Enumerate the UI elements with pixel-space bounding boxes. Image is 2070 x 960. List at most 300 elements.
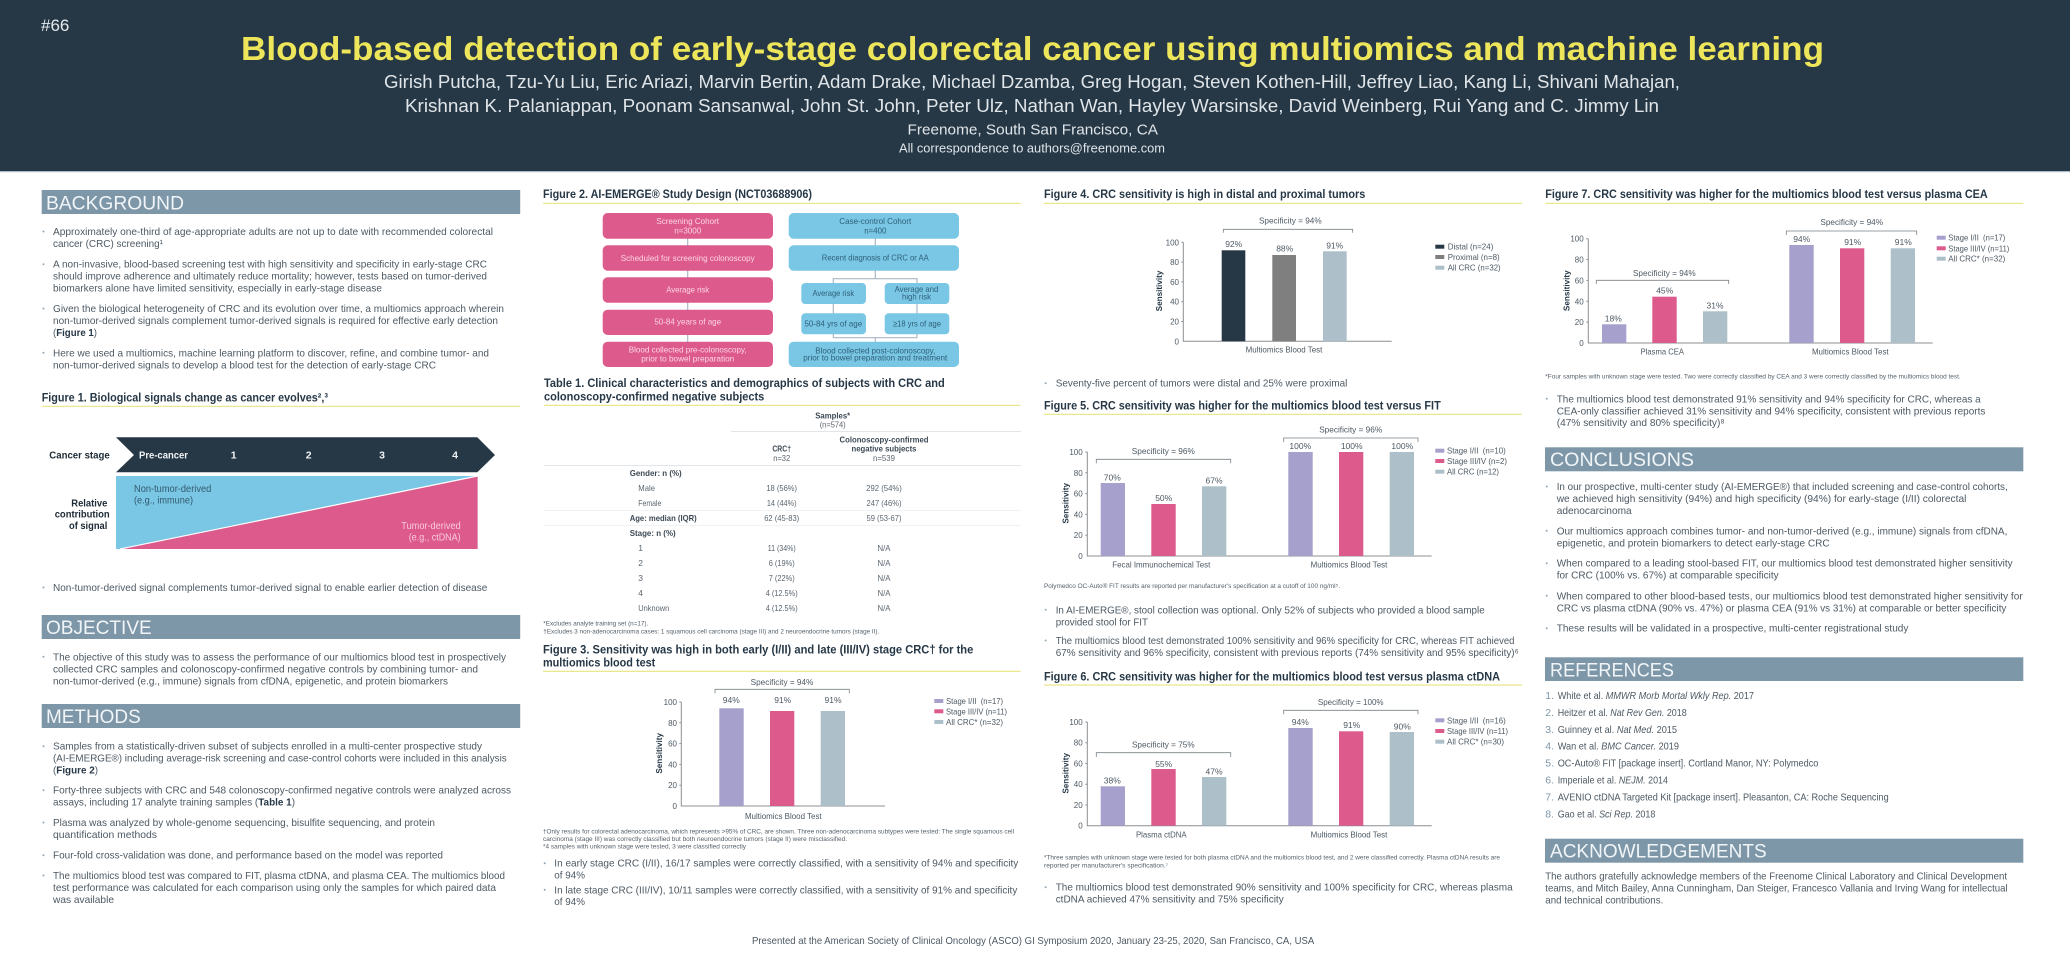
text: methods bullets [42,741,511,906]
text: figure 6 bullet: ctDNA achieved 47% sensitivity and 75% specificity [1056,894,1284,906]
flowchart: case-control cohort: Average risk [812,288,855,298]
text: acknowledgements: teams, and Mitch Bailey, Anna Cunningham, Dan Steiger, Francesco Vallania and Irving Wang for intellectual [1545,882,2008,894]
table rows: 7 (22%) [769,573,795,583]
figure 6 footnotes: *Three samples with unknown stage were tested for both plasma ctDNA and the multiomics blood test, and 2 were classified correctly. Plasma ctDNA results are [1044,854,1500,861]
diagram: relative contribution of signal: Tumor-derived [401,521,461,532]
heading: figure 4: Figure 4. CRC sensitivity is high in distal and proximal tumors [1044,187,1366,201]
figure 5 footnote: Polymedco OC-Auto® FIT results are reported per manufacturer's specification at a cutoff of 100 ng/ml⁵. [1044,582,1340,590]
bar chart: figure 6: 94% [1292,717,1309,727]
table rows: 292 (54%) [866,483,902,493]
text: background bullets: non-tumor-derived signals complement tumor-derived signals is required for effective early detection [53,315,498,327]
table header: n=32 [773,453,790,463]
table footnotes [543,620,879,635]
flowchart: case-control cohort: Recent diagnosis of CRC or AA [822,253,929,263]
legend: figure 6: Stage I/II (n=16) [1447,715,1506,725]
bar chart: figure 3: 40 [668,760,678,769]
bar chart: figure 5: 100% [1391,441,1414,451]
table rows: N/A [878,588,891,598]
table header: (n=574) [820,420,846,430]
legend: figure 4 [1435,242,1501,273]
table rows: 4 (12.5%) [766,603,798,613]
bar chart: figure 7: 31% [1706,300,1724,310]
text: conclusions bullets: we achieved high sensitivity (94%) and high specificity (94%) for early-stage (I/II) colorectal [1556,493,1966,505]
bar chart: figure 7: Multiomics Blood Test [1812,347,1889,357]
bar chart: figure 6: 47% [1205,767,1223,777]
text: conclusions bullets: CRC vs plasma ctDNA (90% vs. 47%) or plasma CEA (91% vs 31%) at comparable or better specificity [1557,602,2007,614]
diagram: cancer stage arrow: 4 [452,450,458,462]
text: background bullets: Here we used a multiomics, machine learning platform to discover, refine, and combine tumor- and [53,347,489,359]
text: background bullets: biomarkers alone have limited sensitivity, especially in early-stage disease [53,283,382,295]
reference list: 7. [1545,792,1554,804]
text: methods bullets: Forty-three subjects with CRC and 548 colonoscopy-confirmed negative controls were analyzed across [53,785,511,797]
section header: references [1545,657,2023,682]
table rows: 3 [638,573,643,583]
bar chart: figure 4: 60 [1170,278,1180,287]
bar chart: figure 3: 91% [774,695,792,705]
figure 6 footnotes: reported per manufacturer's specification.⁷ [1044,862,1169,869]
reference list: Guinney et al. Nat Med. 2015 [1558,724,1677,736]
panel: acknowledgements [1545,839,2023,906]
footer: Presented at the American Society of Clinical Oncology (ASCO) GI Symposium 2020, January 23-25, 2020, San Francisco, CA, USA [752,935,1314,947]
text: acknowledgements: The authors gratefully acknowledge members of the Freenome Clinical Laboratory and Clinical Development [1545,870,2007,882]
flowchart: screening cohort: Scheduled for screening colonoscopy [621,253,755,263]
text: methods bullets: Four-fold cross-validation was done, and performance based on the model was reported [53,850,443,862]
bar chart: figure 6: Specificity = 100% [1318,697,1384,707]
text: methods bullets: (AI-EMERGE®) including average-risk screening and case-control cohorts were included in this analysis [53,753,507,765]
panel: conclusions [1545,447,2023,635]
bar chart: figure 7: Sensitivity [1562,270,1571,311]
legend: figure 6: All CRC* (n=30) [1447,737,1504,747]
panel: objective [42,615,520,687]
text: methods bullets: Samples from a statistically-driven subset of subjects enrolled in a multi-center prospective study [53,741,483,753]
panel: figure 1 [42,391,520,594]
text: figure 7 bullet: CEA-only classifier achieved 31% sensitivity and 94% specificity, consistent with previous reports [1557,405,1985,417]
diagram: cancer stage arrow: Pre-cancer [139,450,188,462]
table header [544,410,1021,466]
bar chart: figure 3: Multiomics Blood Test [745,811,822,821]
bar chart: figure 4: 40 [1170,298,1180,307]
heading: figure 3: multiomics blood test [543,655,655,669]
flowchart: case-control cohort: ≥18 yrs of age [893,318,941,328]
section header: references: REFERENCES [1550,660,1674,682]
text: figure 7 bullet: (47% sensitivity and 80% specificity)⁸ [1557,417,1725,429]
figure 7 footnote: *Four samples with unknown stage were tested. Two were correctly classified by CEA and 3 were correctly classified by the multiomics blood test. [1545,374,1961,381]
table rows: Gender: n (%) [630,468,682,478]
legend: figure 7: All CRC* (n=32) [1948,254,2005,264]
bar chart: figure 4: Multiomics Blood Test [1246,344,1323,354]
table rows: Female [638,498,662,508]
bar chart: figure 5: 50% [1155,493,1173,503]
bar chart: figure 7: Specificity = 94% [1633,268,1696,278]
legend: figure 7: Stage I/II (n=17) [1948,233,2005,243]
text: acknowledgements [1545,870,2008,906]
table header: CRC† [772,444,791,454]
heading: figure 5: Figure 5. CRC sensitivity was higher for the multiomics blood test versus FIT [1044,398,1441,412]
bar chart: figure 7: 45% [1656,286,1674,296]
flowchart: case-control cohort: high risk [902,291,932,301]
legend: figure 7: Stage III/IV (n=11) [1948,243,2009,253]
diagram: relative contribution of signal: of signal [69,520,107,532]
text: figure 3 bullets [544,858,1019,908]
table rows: N/A [878,573,891,583]
correspondence: All correspondence to authors@freenome.com [899,142,1165,156]
section header: background [42,190,520,214]
legend: figure 3: All CRC* (n=32) [946,717,1003,727]
table header: n=539 [873,453,895,463]
table rows: 6 (19%) [769,558,795,568]
flowchart: case-control cohort: 50-84 yrs of age [804,318,862,328]
section header: methods: METHODS [46,706,141,728]
heading: figure 1: Figure 1. Biological signals change as cancer evolves²,³ [42,391,328,405]
section header: conclusions [1545,447,2023,471]
table rows: 59 (53-67) [866,513,902,523]
legend: figure 6: Stage III/IV (n=11) [1447,726,1508,736]
authors: Krishnan K. Palaniappan, Poonam Sansanwal, John St. John, Peter Ulz, Nathan Wan, Hayley Warsinske, David Weinberg, Rui Yang and C. Jimmy Lin [405,96,1659,116]
bar chart: figure 5: 100% [1289,441,1312,451]
reference list: 6. [1545,775,1554,787]
heading: figure 3 [543,642,1021,672]
flowchart: screening cohort [603,213,773,367]
text: background bullets: A non-invasive, blood-based screening test with high sensitivity and specificity in early-stage CRC [53,259,487,271]
bar chart: figure 5: 20 [1074,531,1083,540]
table rows: 62 (45-83) [764,513,799,523]
table header: Colonoscopy-confirmed [840,434,928,444]
reference list: 5. [1545,758,1554,770]
bar chart: figure 4: 100 [1166,238,1180,247]
panel: background [42,190,520,371]
bar chart: figure 5: 67% [1205,475,1223,485]
text: methods bullets: (Figure 2) [53,765,98,777]
diagram: cancer stage arrow [49,437,495,472]
reference list: Imperiale et al. NEJM. 2014 [1558,775,1668,787]
section header: methods [42,704,520,728]
table footnotes: *Excludes analyte training set (n=17). [543,620,648,627]
bar chart: figure 6: Specificity = 75% [1132,739,1195,749]
figure 3 footnotes: *4 samples with unknown stage were tested, 3 were classified correctly [543,844,747,851]
panel: figure 7 [1545,187,2023,429]
diagram: relative contribution of signal: Non-tumor-derived [134,484,211,495]
text: methods bullets: assays, including 17 analyte training samples (Table 1) [53,797,295,809]
diagram: cancer stage arrow: 3 [379,450,385,462]
text: methods bullets: The multiomics blood test was compared to FIT, plasma ctDNA, and plasma CEA. The multiomics blood [53,870,505,882]
text: figure 3 bullets: of 94% [554,896,585,908]
bar chart: figure 6: 55% [1155,759,1173,769]
bar chart: figure 4 [1155,216,1501,354]
text: methods bullets: Plasma was analyzed by whole-genome sequencing, bisulfite sequencing, and protein [53,817,435,829]
bar chart: figure 6: 80 [1074,739,1083,748]
bar chart: figure 5: 60 [1074,490,1083,499]
bar chart: figure 5: Multiomics Blood Test [1311,559,1388,569]
heading: table 1 [544,376,1020,406]
reference list: AVENIO ctDNA Targeted Kit [package insert]. Pleasanton, CA: Roche Sequencing [1558,792,1889,804]
legend: figure 5: Stage III/IV (n=2) [1447,456,1507,466]
text: figure 6 bullet: The multiomics blood test demonstrated 90% sensitivity and 100% specificity for CRC, whereas plasma [1056,882,1513,894]
text: conclusions bullets: When compared to other blood-based tests, our multiomics blood test demonstrated higher sensitivity for [1557,590,2023,602]
bar chart: figure 7: 80 [1575,256,1584,265]
text: figure 4 bullet: Seventy-five percent of tumors were distal and 25% were proximal [1056,378,1347,390]
legend: figure 5: All CRC (n=12) [1447,467,1499,477]
diagram: cancer stage arrow: 2 [306,450,312,462]
text: background bullets [42,226,504,371]
text: conclusions bullets: Our multiomics approach combines tumor- and non-tumor-derived (e.g., immune) signals from cfDNA, [1557,525,2007,537]
table rows: 247 (46%) [866,498,902,508]
text: figure 6 bullet [1045,882,1513,906]
text: conclusions bullets: for CRC (100% vs. 67%) at comparable specificity [1557,570,1779,582]
bar chart: figure 6: 0 [1078,822,1083,831]
bar chart: figure 4: 20 [1170,318,1180,326]
text: conclusions bullets: epigenetic, and protein biomarkers to detect early-stage CRC [1557,537,1830,549]
text: background bullets: non-tumor-derived signals to develop a blood test for the detection of early-stage CRC [53,359,436,371]
section header: objective: OBJECTIVE [46,617,152,639]
table rows: 4 (12.5%) [766,588,798,598]
reference list: 8. [1545,808,1554,820]
legend: figure 7 [1937,233,2009,264]
bar chart: figure 3: 80 [668,719,678,728]
bar chart: figure 6: 20 [1074,801,1083,810]
table rows: 14 (44%) [767,498,797,508]
legend: figure 4: Distal (n=24) [1448,242,1494,252]
header banner [0,0,2070,172]
text: background bullets: should improve adherence and ultimately reduce mortality; however, tests based on tumor-derived [53,271,487,283]
text: conclusions bullets: In our prospective, multi-center study (AI-EMERGE®) that included screening and case-control cohorts, [1557,481,2008,493]
bar chart: figure 5 [1061,425,1507,569]
flowchart connectors [688,238,917,342]
bar chart: figure 4: 80 [1170,258,1180,267]
panel: figure 6 [1044,669,1522,906]
text: figure 5 bullets: provided stool for FIT [1056,616,1149,628]
bar chart: figure 5: 70% [1104,473,1121,483]
text: figure 7 bullet [1546,393,1985,429]
authors: Girish Putcha, Tzu-Yu Liu, Eric Ariazi, Marvin Bertin, Adam Drake, Michael Dzamba, Greg Hogan, Steven Kothen-Hill, Jeffrey Liao, Kang Li, Shivani Mahajan, [384,72,1680,92]
reference list: 3. [1545,724,1554,736]
bar chart: figure 5: 100% [1341,441,1363,451]
bar chart: figure 4: 92% [1225,239,1243,249]
reference list: 4. [1545,741,1554,753]
bar chart: figure 7: 100 [1570,235,1584,244]
text: conclusions bullets: adenocarcinoma [1557,505,1632,517]
bar chart: figure 7: 91% [1895,237,1912,247]
bar chart: figure 4: 91% [1326,240,1344,250]
bar chart: figure 3: 94% [723,695,740,705]
text: conclusions bullets: These results will be validated in a prospective, multi-center registrational study [1557,623,1909,635]
flowchart: case-control cohort: prior to bowel preparation and treatment [803,353,948,363]
text: objective bullet: non-tumor-derived (e.g., immune) signals from cfDNA, epigenetic, and protein biomarkers [53,675,448,687]
panel: figure 4 [1044,187,1522,390]
figure 3 footnotes: †Only results for colorectal adenocarcinoma, which represents >95% of CRC, are shown. Three non-adenocarcinoma subtypes were tested: The single squamous cell [543,828,1015,835]
flowchart: case-control cohort [789,213,959,367]
bar chart: figure 3: Specificity = 94% [751,677,814,687]
bar chart: figure 5: Fecal Immunochemical Test [1112,559,1211,569]
text: figure 1 bullet: Non-tumor-derived signal complements tumor-derived signal to enable earlier detection of disease [53,582,487,594]
table rows: 2 [638,558,643,568]
diagram: cancer stage arrow: Cancer stage [49,450,110,462]
panel: methods [42,704,520,906]
bar chart: figure 3: 91% [824,695,842,705]
text: objective bullet: The objective of this study was to assess the performance of our multiomics blood test in prospectively [53,651,507,663]
diagram: relative contribution of signal: contribution [55,509,110,521]
bar chart: figure 7: 18% [1605,313,1622,323]
flowchart: case-control cohort: Blood collected post-colonoscopy, [815,345,935,355]
table rows [544,468,1021,613]
section header: background: BACKGROUND [46,192,184,214]
bar chart: figure 5: 100 [1069,448,1083,457]
bar chart: figure 3: 100 [664,698,678,707]
text: figure 5 bullets [1045,604,1519,659]
bar chart: figure 6: Sensitivity [1061,752,1070,794]
text: objective bullet [42,651,507,687]
text: figure 7 bullet: The multiomics blood test demonstrated 91% sensitivity and 94% specificity for CRC, whereas a [1557,393,1981,405]
text: methods bullets: quantification methods [53,829,157,841]
affiliation: Freenome, South San Francisco, CA [908,123,1158,139]
text: figure 5 bullets: 67% sensitivity and 96% specificity, consistent with previous reports (74% sensitivity and 95% specificity)⁶ [1056,647,1519,659]
bar chart: figure 3: 20 [668,781,678,790]
figure 6 footnotes [1044,854,1500,869]
authors [384,72,1680,116]
text: objective bullet: collected CRC samples and colonoscopy-confirmed negative controls by combining tumor- and [53,663,478,675]
reference list [1545,690,1889,820]
panel: figure 2 study design [543,187,1021,367]
bar chart: figure 5: 0 [1078,552,1083,561]
flowchart: case-control cohort: n=400 [864,225,887,235]
text: background bullets: Approximately one-third of age-appropriate adults are not up to date with recommended colorectal [53,226,493,238]
legend: figure 5 [1435,446,1507,477]
table rows: Male [638,483,655,493]
bar chart: figure 6: 38% [1104,775,1121,785]
reference list: Heitzer et al. Nat Rev Gen. 2018 [1558,707,1687,719]
flowchart: screening cohort: Screening Cohort [656,216,720,226]
table rows: Unknown [638,603,670,613]
bar chart: figure 6: Multiomics Blood Test [1311,829,1388,839]
flowchart: screening cohort: Blood collected pre-colonoscopy, [629,344,747,354]
bar chart: figure 5: Specificity = 96% [1132,446,1195,456]
text: figure 3 bullets: of 94% [554,870,585,882]
bar chart: figure 4: Sensitivity [1155,270,1164,311]
section header: acknowledgements: ACKNOWLEDGEMENTS [1550,841,1767,863]
bar chart: figure 3: 60 [668,740,678,749]
section header: objective [42,615,520,639]
bar chart: figure 4: Specificity = 94% [1259,216,1322,226]
heading: table 1: Table 1. Clinical characteristics and demographics of subjects with CRC and [544,376,945,390]
heading: figure 6: Figure 6. CRC sensitivity was higher for the multiomics blood test versus plasma ctDNA [1044,669,1500,683]
bar chart: figure 7: Plasma CEA [1641,347,1684,357]
bar chart: figure 7: 60 [1575,276,1584,285]
bar chart: figure 4: 0 [1175,337,1180,346]
table rows: N/A [878,543,891,553]
flowchart: screening cohort: prior to bowel preparation [641,354,734,364]
panel: figure 3 [543,642,1021,908]
text: figure 5 bullets: The multiomics blood test demonstrated 100% sensitivity and 96% specificity for CRC, whereas FIT achieved [1056,635,1515,647]
text: methods bullets: was available [52,894,114,906]
legend: figure 6 [1435,715,1508,747]
reference list: White et al. MMWR Morb Mortal Wkly Rep. 2017 [1558,690,1754,702]
flowchart: screening cohort: n=3000 [674,225,701,235]
reference list: Gao et al. Sci Rep. 2018 [1558,808,1656,820]
bar chart: figure 7: 20 [1575,318,1584,327]
bar chart: figure 6: Plasma ctDNA [1136,829,1187,839]
table rows: N/A [878,558,891,568]
table rows: Age: median (IQR) [630,513,697,523]
bar chart: figure 3: Sensitivity [655,732,664,774]
text: acknowledgements: and technical contributions. [1545,894,1663,906]
reference list: Wan et al. BMC Cancer. 2019 [1558,741,1679,753]
table header: Samples* [815,410,851,420]
reference list: 1. [1545,690,1554,702]
table rows: N/A [878,603,891,613]
table rows: 18 (56%) [766,483,797,493]
bar chart: figure 6: 91% [1343,720,1361,730]
legend: figure 3: Stage III/IV (n=11) [946,706,1007,716]
bar chart: figure 3 [655,677,1007,821]
panel: references [1545,657,2023,820]
legend: figure 4: All CRC (n=32) [1448,263,1501,273]
figure 3 footnotes: carcinoma (stage III) was correctly classified but both neuroendocrine tumors (stage II) were misclassified. [543,836,847,843]
bar chart: figure 7 [1562,217,2009,357]
bar chart: figure 5: Sensitivity [1061,482,1070,524]
heading: figure 7: Figure 7. CRC sensitivity was higher for the multiomics blood test versus plasma CEA [1545,187,1988,201]
heading: figure 2: Figure 2. AI-EMERGE® Study Design (NCT03688906) [543,187,812,201]
table rows: 1 [638,543,643,553]
flowchart: case-control cohort: Average and [895,284,939,294]
diagram: cancer stage arrow: 1 [231,450,237,462]
legend: figure 3 [934,696,1007,727]
table rows: 4 [638,588,643,598]
reference list: OC-Auto® FIT [package insert]. Cortland Manor, NY: Polymedco [1558,758,1819,770]
flowchart: screening cohort: Average risk [666,285,710,295]
title: Blood-based detection of early-stage colorectal cancer using multiomics and machine learning [241,31,1824,68]
diagram: relative contribution of signal: (e.g., immune) [134,496,193,507]
bar chart: figure 7: 94% [1793,234,1811,244]
bar chart: figure 6: 60 [1074,760,1083,768]
bar chart: figure 5: Specificity = 96% [1319,425,1383,435]
text: conclusions bullets: When compared to a leading stool-based FIT, our multiomics blood test demonstrated higher sensitivity [1557,558,2013,570]
bar chart: figure 6: 40 [1074,780,1083,789]
legend: figure 3: Stage I/II (n=17) [946,696,1003,706]
panel: figure 5 [1044,398,1522,659]
bar chart: figure 7: Specificity = 94% [1820,217,1883,227]
text: methods bullets: test performance was calculated for each comparison using only the samples for which paired data [53,882,496,894]
bar chart: figure 5: 40 [1074,510,1083,519]
text: background bullets: (Figure 1) [53,327,97,339]
poster number: #66 [41,16,69,35]
text: figure 3 bullets: In late stage CRC (III/IV), 10/11 samples were correctly classified, with a sensitivity of 91% and specificity [554,884,1018,896]
section header: acknowledgements [1545,839,2023,863]
table rows: 11 (34%) [768,543,796,553]
text: background bullets: Given the biological heterogeneity of CRC and its evolution over time, a multiomics approach wherein [53,303,504,315]
text: conclusions bullets [1546,481,2023,635]
text: background bullets: cancer (CRC) screening¹ [53,238,163,250]
bar chart: figure 7: 91% [1844,237,1862,247]
bar chart: figure 7: 40 [1575,297,1584,306]
legend: figure 5: Stage I/II (n=10) [1447,446,1506,456]
table footnotes: †Excludes 3 non-adenocarcinoma cases: 1 squamous cell carcinoma (stage III) and 2 neuroendocrine tumors (stage II). [543,628,879,635]
heading: table 1: colonoscopy-confirmed negative subjects [544,389,765,403]
figure 3 footnotes [543,828,1015,851]
bar chart: figure 6: 90% [1394,722,1411,732]
diagram: relative contribution of signal [55,476,478,549]
bar chart: figure 7: 0 [1579,339,1584,348]
table rows: Stage: n (%) [630,528,676,538]
bar chart: figure 6: 100 [1069,718,1083,727]
bar chart: figure 5: 80 [1074,469,1083,478]
legend: figure 4: Proximal (n=8) [1448,252,1500,262]
section header: conclusions: CONCLUSIONS [1550,449,1694,471]
bar chart: figure 4: 88% [1276,243,1294,253]
heading: figure 3: Figure 3. Sensitivity was high in both early (I/II) and late (III/IV) stage CRC† for the [543,642,974,656]
panel: table 1 [543,376,1021,635]
text: figure 3 bullets: In early stage CRC (I/II), 16/17 samples were correctly classified, with a sensitivity of 94% and specificity [554,858,1019,870]
table header: negative subjects [852,444,917,454]
bar chart: figure 6 [1061,697,1508,839]
